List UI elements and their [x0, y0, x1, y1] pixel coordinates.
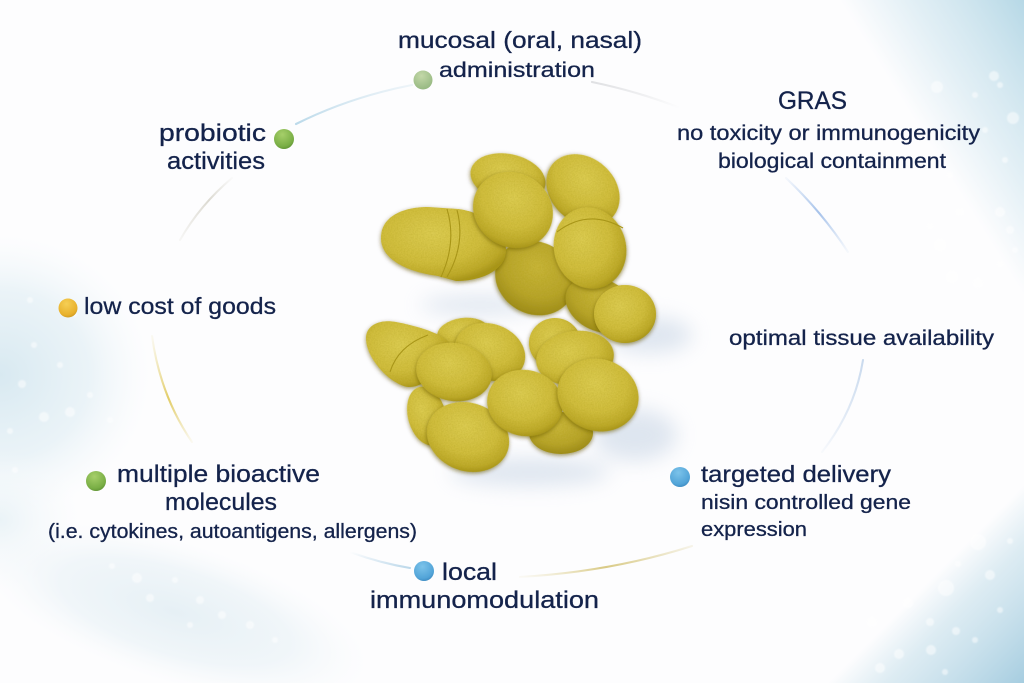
node: targeted delivery [670, 461, 911, 541]
node: probiotic activities [159, 120, 294, 175]
node: mucosal administration: administration [439, 59, 595, 82]
node: GRAS [677, 87, 981, 173]
node: local immunomodulation: immunomodulation [370, 587, 599, 614]
node: mucosal administration: mucosal (oral, nasal) [398, 27, 642, 53]
node: GRAS: no toxicity or immunogenicity [677, 122, 981, 145]
node: optimal tissue availability: optimal tissue availability [729, 327, 995, 350]
node: targeted delivery: targeted delivery [701, 461, 892, 487]
bacteria shadows [420, 296, 692, 486]
node: low cost of goods: low cost of goods [84, 293, 276, 319]
node: multiple bioactive molecules: molecules [165, 489, 277, 516]
node: probiotic activities: probiotic [159, 120, 266, 147]
node: local immunomodulation [370, 559, 599, 614]
node: mucosal administration [398, 27, 642, 90]
node: GRAS: biological containment [718, 150, 946, 173]
node: multiple bioactive molecules: multiple bioactive [117, 461, 320, 488]
node: multiple bioactive molecules [48, 461, 417, 543]
node: probiotic activities: activities [167, 148, 265, 175]
node: multiple bioactive molecules: (i.e. cytokines, autoantigens, allergens) [48, 521, 417, 543]
bacteria image: bottom cluster [366, 313, 648, 483]
node: targeted delivery: nisin controlled gene [701, 492, 911, 514]
node: targeted delivery: expression [701, 519, 807, 541]
node: GRAS: GRAS [778, 87, 847, 115]
ring of arcs [152, 82, 863, 577]
bacteria image: top cluster [381, 139, 656, 344]
node: local immunomodulation: local [442, 559, 497, 586]
